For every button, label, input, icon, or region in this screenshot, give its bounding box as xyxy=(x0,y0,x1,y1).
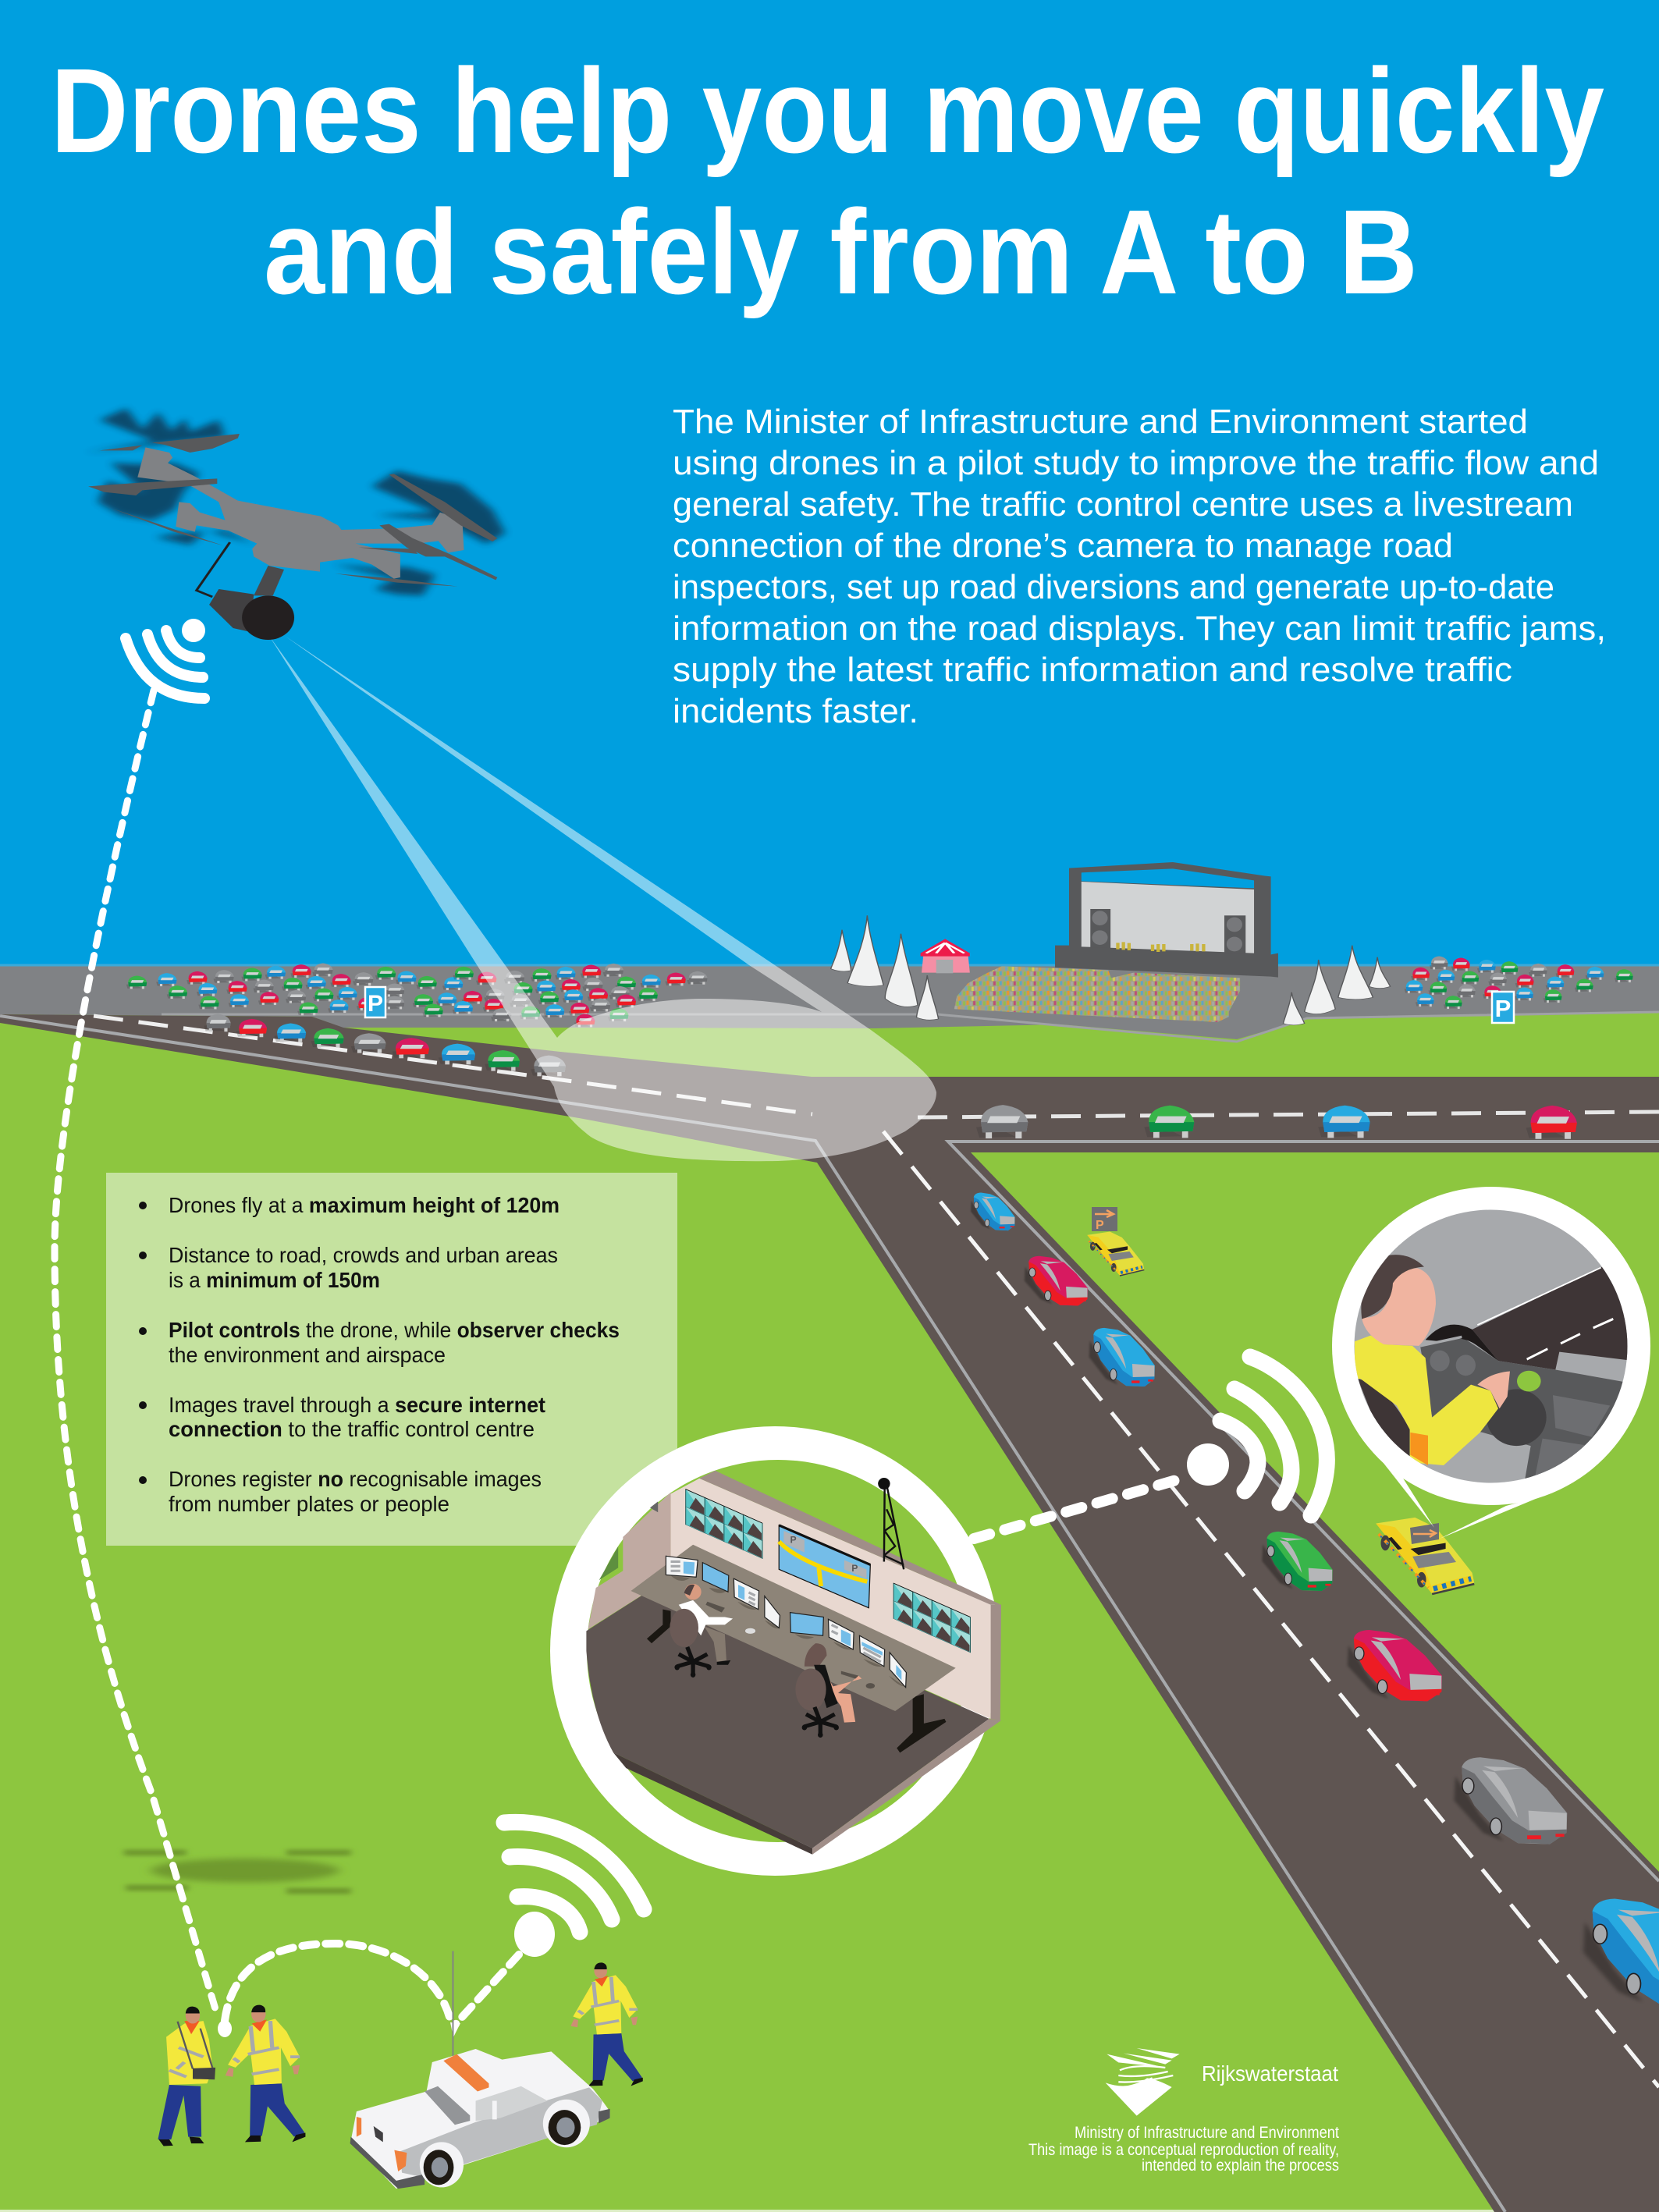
camera gimbal xyxy=(254,566,284,595)
camera beam and view area xyxy=(269,636,936,1161)
support truck xyxy=(350,2049,610,2189)
footer note: intended to explain the process xyxy=(1142,2157,1339,2175)
title: and safely from A to B xyxy=(264,185,1418,319)
footer note: Ministry of Infrastructure and Environment xyxy=(1075,2124,1339,2142)
wall monitors: P xyxy=(851,1563,858,1574)
logo mark xyxy=(1106,2048,1180,2116)
control room magnifier circle xyxy=(550,1426,1001,1876)
information panel: Pilot controls the drone, while observer checks xyxy=(169,1318,620,1342)
intro paragraph: connection of the drone’s camera to manage road xyxy=(673,527,1453,565)
drone wifi signal xyxy=(126,619,205,698)
dashed signal line drone to operator xyxy=(55,691,215,2009)
parking sign right xyxy=(1492,992,1514,1023)
intro paragraph: information on the road displays. They can limit traffic jams, xyxy=(673,609,1606,648)
male operator xyxy=(670,1584,733,1678)
footer note xyxy=(1028,2124,1339,2175)
wall monitors xyxy=(686,1489,970,1653)
intro paragraph: inspectors, set up road diversions and generate up-to-date xyxy=(673,568,1554,606)
wifi signal on road xyxy=(1187,1357,1327,1515)
drone body xyxy=(137,447,464,579)
desk xyxy=(647,1610,946,1752)
sign: parking arrow: P xyxy=(1096,1219,1104,1232)
Rijkswaterstaat logo xyxy=(1106,2048,1338,2116)
control room illustration xyxy=(586,1471,1001,1855)
cars on left road xyxy=(204,1014,566,1076)
cars on diagonal road xyxy=(971,1193,1659,2006)
festival: stage, tents, crowd, right parking xyxy=(831,862,1633,1139)
road inspector vehicle near driver bubble xyxy=(1376,1518,1474,1594)
road network xyxy=(0,1014,1659,2212)
information panel: the environment and airspace xyxy=(169,1343,446,1367)
intro paragraph: general safety. The traffic control centre uses a livestream xyxy=(673,485,1573,524)
information panel: Images travel through a secure internet xyxy=(169,1393,545,1417)
observer xyxy=(226,2005,305,2142)
intro paragraph: supply the latest traffic information and resolve traffic xyxy=(673,651,1512,689)
wall monitors: P xyxy=(790,1535,797,1546)
parking sign right: P xyxy=(1495,995,1511,1022)
stage xyxy=(1055,862,1278,978)
desk monitors xyxy=(666,1556,906,1688)
information panel: Distance to road, crowds and urban areas xyxy=(169,1243,558,1267)
festival ground grey band xyxy=(0,965,1659,1042)
rotor blur xyxy=(85,408,506,595)
white tents xyxy=(831,915,1391,1025)
cars on horizontal road xyxy=(976,1105,1577,1139)
festival parking lot left xyxy=(126,964,708,1027)
right parking lot xyxy=(1405,957,1633,1009)
dashed link between operator and truck xyxy=(218,1944,519,2037)
female operator xyxy=(795,1643,861,1738)
Rijkswaterstaat logo: Rijkswaterstaat xyxy=(1202,2061,1338,2086)
drone xyxy=(85,408,506,640)
information panel: connection to the traffic control centre xyxy=(169,1417,535,1441)
road inspector walking xyxy=(570,1962,643,2086)
footer note: This image is a conceptual reproduction of reality, xyxy=(1028,2141,1339,2159)
information panel: from number plates or people xyxy=(169,1492,449,1516)
intro paragraph: using drones in a pilot study to improve the traffic flow and xyxy=(673,444,1599,482)
circus tent xyxy=(921,939,970,973)
propeller blades xyxy=(88,434,497,587)
drone pilot with controller xyxy=(158,2007,215,2146)
information panel: Drones fly at a maximum height of 120m xyxy=(169,1193,560,1217)
information panel xyxy=(106,1173,677,1546)
intro paragraph: The Minister of Infrastructure and Environment started xyxy=(673,403,1528,441)
driver illustration xyxy=(1355,1209,1628,1482)
information panel: is a minimum of 150m xyxy=(169,1268,380,1292)
drone ground shadow xyxy=(124,1849,351,1894)
intro paragraph: incidents faster. xyxy=(673,692,918,730)
antenna xyxy=(451,1951,454,2083)
parking sign left xyxy=(365,987,385,1017)
crowd xyxy=(954,966,1240,1022)
green field xyxy=(0,965,1659,2212)
bottom edge line xyxy=(0,2210,1659,2212)
parking sign left: P xyxy=(368,991,383,1017)
title xyxy=(51,44,1604,319)
driver magnifier bubble xyxy=(1332,1187,1650,1539)
wifi signal at truck xyxy=(504,1822,644,1957)
antenna tower xyxy=(879,1479,904,1569)
information panel: Drones register no recognisable images xyxy=(169,1467,542,1491)
sky background xyxy=(0,0,1659,968)
people and truck xyxy=(158,1951,643,2189)
road inspector vehicle with parking sign xyxy=(1087,1207,1144,1276)
intro paragraph xyxy=(673,403,1606,730)
dashed link road signal to control room xyxy=(974,1477,1187,1539)
